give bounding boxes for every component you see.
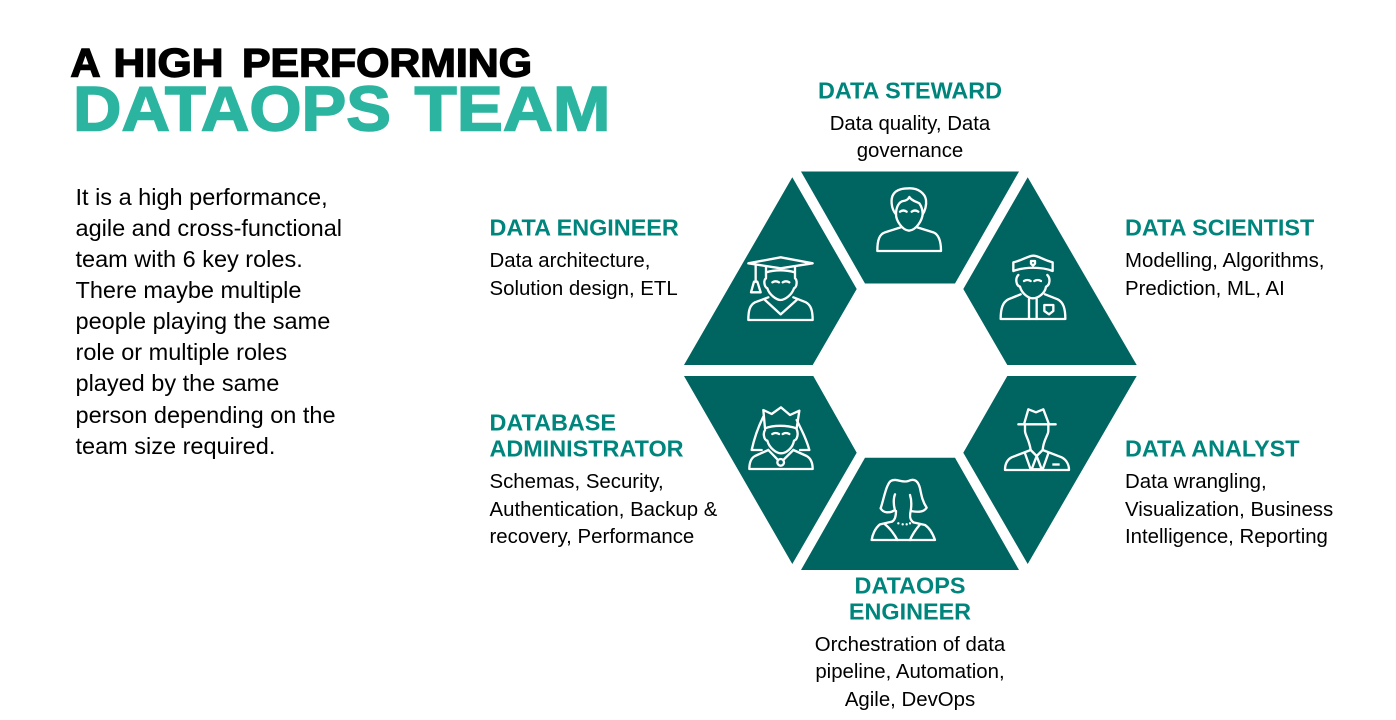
intro text: person depending on the [76, 402, 336, 428]
role: database administrator: DATABASE [490, 410, 616, 436]
intro text: team size required. [76, 433, 275, 459]
icon: data analyst detective [1005, 409, 1069, 470]
role: data scientist: Modelling, Algorithms, [1125, 250, 1324, 272]
role: data engineer: DATA ENGINEER [490, 214, 679, 240]
icon: data scientist officer [1001, 256, 1065, 319]
title: DATAOPS [73, 74, 391, 144]
role: dataops engineer: pipeline, Automation, [815, 661, 1005, 683]
role: data analyst: Data wrangling, [1125, 471, 1267, 493]
role: database administrator: Schemas, Security, [490, 471, 664, 493]
role: data steward: Data quality, Data [830, 113, 991, 135]
icon: data engineer graduate [748, 257, 813, 320]
role: data steward [818, 78, 1002, 162]
role: data analyst [1125, 436, 1333, 548]
role: data analyst: DATA ANALYST [1125, 436, 1300, 462]
intro text: It is a high performance, [76, 184, 328, 210]
hexagon diagram [684, 172, 1137, 570]
segment: data steward [801, 172, 1019, 284]
intro text: played by the same [76, 370, 279, 396]
intro text: role or multiple roles [76, 339, 287, 365]
role: database administrator: recovery, Performance [490, 526, 694, 548]
intro text: team with 6 key roles. [76, 246, 303, 272]
title [70, 42, 610, 144]
intro text: agile and cross-functional [76, 215, 342, 241]
segment: data engineer [684, 177, 857, 365]
role: data analyst: Intelligence, Reporting [1125, 526, 1328, 548]
title: TEAM [414, 74, 610, 144]
title: HIGH [114, 42, 224, 86]
role: data engineer [490, 214, 679, 300]
role: data engineer: Data architecture, [490, 250, 650, 272]
role: dataops engineer [815, 572, 1006, 711]
role: data scientist: Prediction, ML, AI [1125, 278, 1285, 300]
role: dataops engineer: Orchestration of data [815, 634, 1006, 656]
intro text [76, 184, 342, 459]
intro text: people playing the same [76, 308, 330, 334]
role: data steward: DATA STEWARD [818, 78, 1002, 104]
role: database administrator: ADMINISTRATOR [490, 436, 684, 462]
segment: data analyst [963, 376, 1137, 564]
role: dataops engineer: DATAOPS [855, 572, 965, 598]
icon: data steward person [877, 188, 941, 251]
role: data engineer: Solution design, ETL [490, 278, 678, 300]
role: dataops engineer: Agile, DevOps [845, 689, 975, 711]
title: PERFORMING [242, 42, 532, 86]
title: A [70, 42, 100, 86]
icon: database administrator queen [749, 407, 813, 469]
segment: dataops engineer [801, 458, 1019, 570]
role: data scientist [1125, 214, 1324, 300]
role: data analyst: Visualization, Business [1125, 499, 1333, 521]
role: database administrator [490, 410, 718, 548]
role: database administrator: Authentication, Backup & [490, 499, 718, 521]
role: dataops engineer: ENGINEER [849, 598, 971, 624]
icon: dataops engineer woman [872, 480, 935, 540]
segment: database administrator [684, 376, 857, 564]
role: data scientist: DATA SCIENTIST [1125, 214, 1315, 240]
role: data steward: governance [857, 140, 963, 162]
intro text: There maybe multiple [76, 277, 301, 303]
segment: data scientist [963, 177, 1137, 365]
